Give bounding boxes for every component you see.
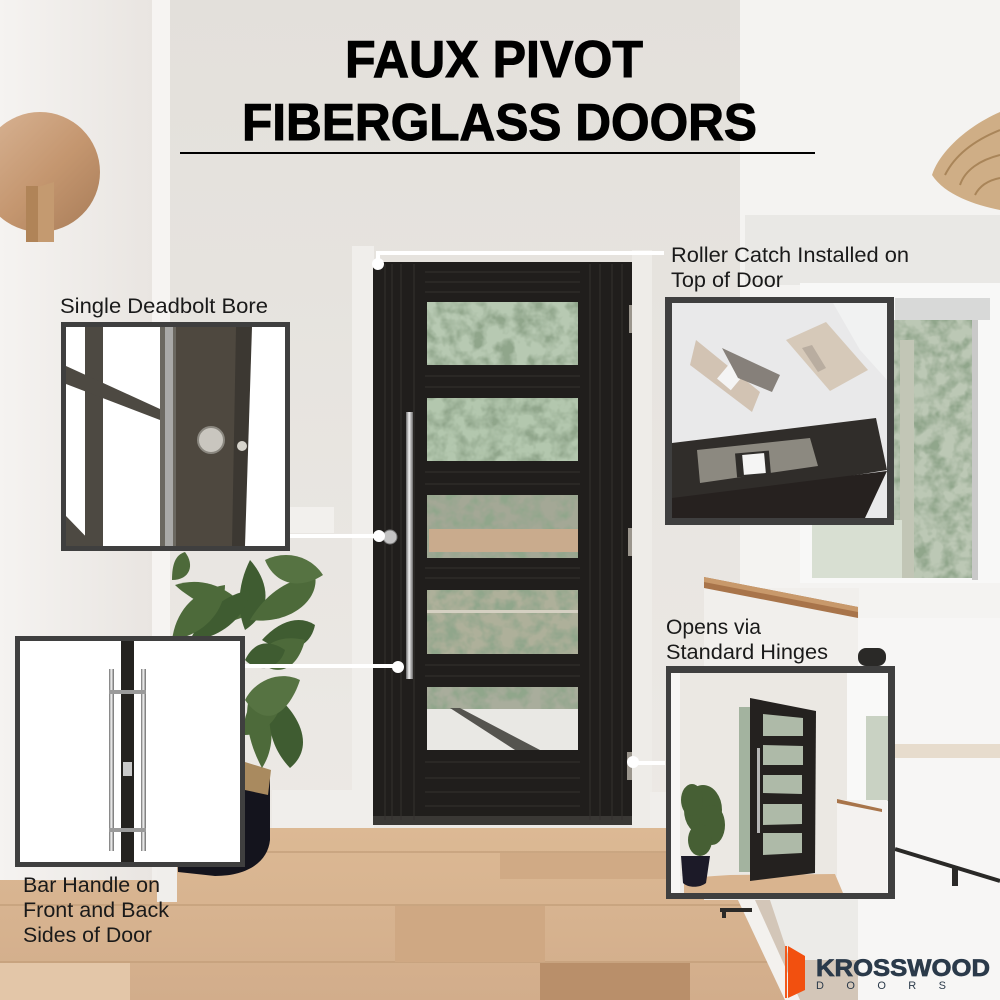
door grain — [385, 264, 622, 820]
small plant — [681, 784, 725, 856]
label: hinges: Standard Hinges — [666, 641, 828, 664]
label: roller catch — [671, 244, 909, 292]
inset: deadbolt bore — [61, 322, 290, 551]
label: roller catch: Roller Catch Installed on — [671, 244, 909, 267]
leader lines — [245, 253, 665, 768]
title — [180, 31, 815, 154]
label: bar handle: Bar Handle on — [23, 874, 160, 897]
inset: roller catch — [665, 297, 894, 525]
label: hinges: Opens via — [666, 616, 761, 639]
door glass panes — [427, 302, 578, 750]
logo — [785, 946, 990, 998]
open door leaf — [750, 698, 816, 881]
logo door icon — [785, 946, 805, 998]
right room with window and stair — [704, 283, 1000, 1000]
inset: bar handle — [15, 636, 245, 867]
bar handle — [383, 412, 413, 679]
pendant lamp — [932, 112, 1000, 210]
floor — [0, 828, 785, 1000]
label: deadbolt bore: Single Deadbolt Bore — [60, 295, 268, 318]
door top with catch — [672, 418, 887, 505]
title: FIBERGLASS DOORS — [242, 94, 757, 152]
title: FAUX PIVOT — [345, 31, 643, 89]
label: bar handle: Front and Back — [23, 899, 170, 922]
label: bar handle: Sides of Door — [23, 924, 152, 947]
logo wordmark: DOORS — [816, 980, 946, 992]
label: hinges — [666, 616, 828, 664]
logo wordmark — [816, 955, 990, 992]
latch hardware — [690, 340, 760, 412]
wall sconce — [0, 112, 100, 242]
door — [373, 262, 632, 825]
label: bar handle — [23, 874, 170, 947]
label: roller catch: Top of Door — [671, 269, 783, 292]
inset: open door — [666, 666, 895, 899]
strike plate — [786, 322, 868, 391]
hinges — [627, 305, 632, 780]
logo wordmark: KROSSWOOD — [816, 955, 990, 982]
plant with pot — [157, 552, 323, 902]
